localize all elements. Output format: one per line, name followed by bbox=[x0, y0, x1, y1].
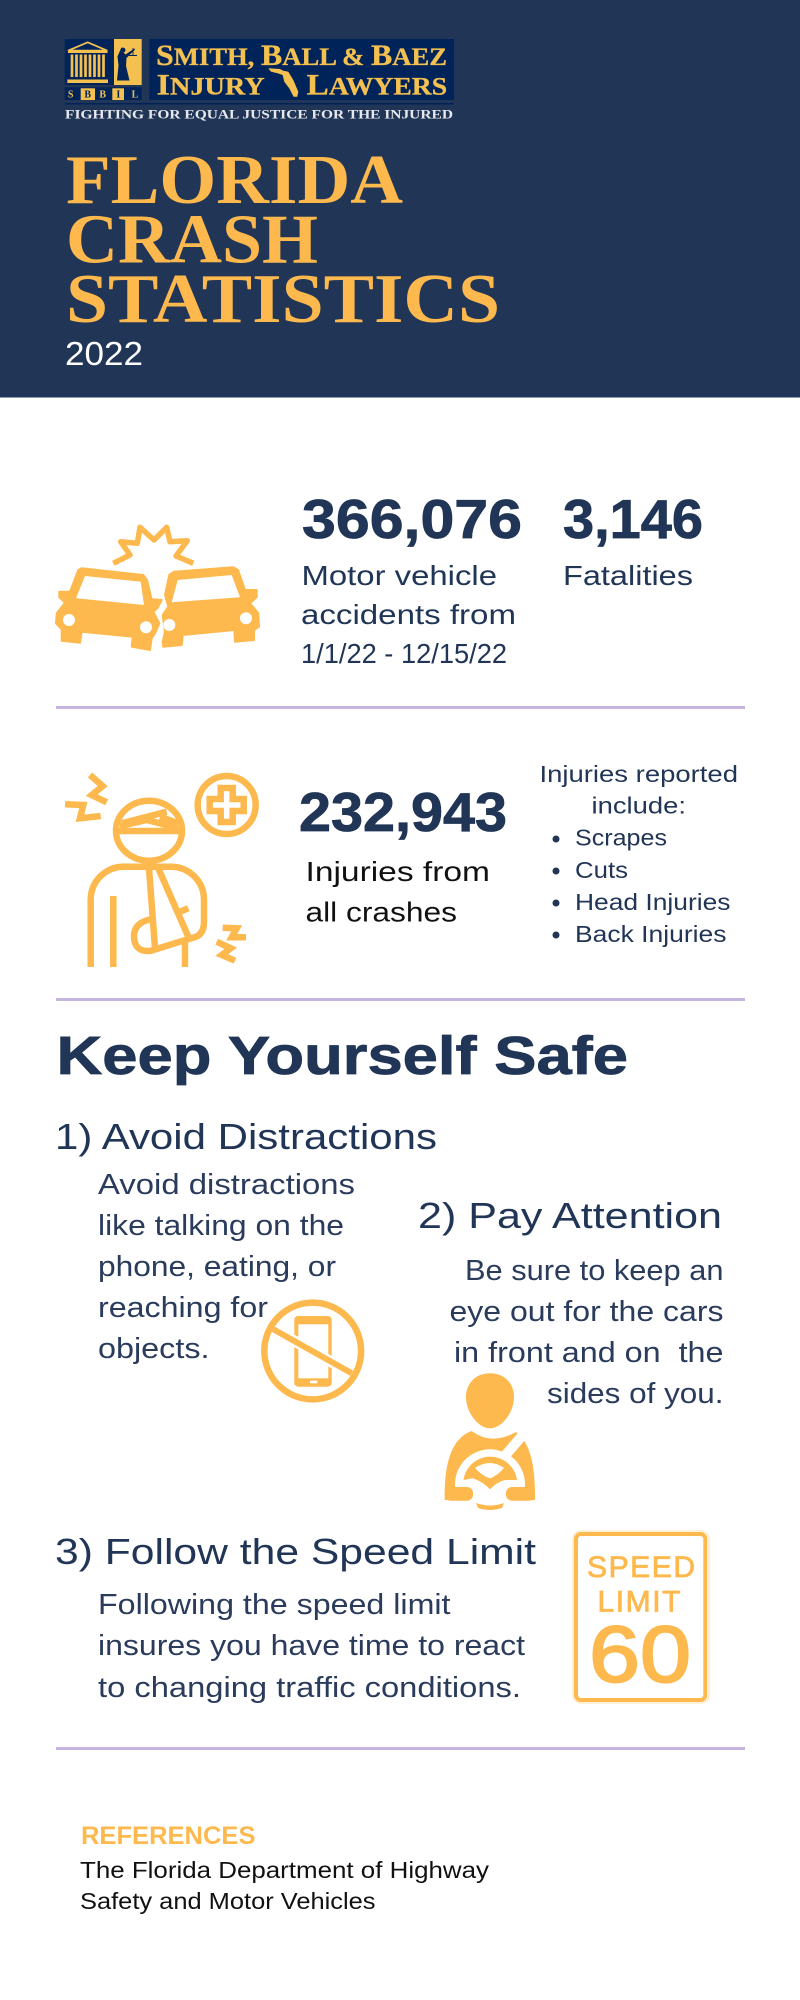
stat: injuries: 232,943 bbox=[299, 781, 507, 843]
list: injuries reported: Head Injuries bbox=[575, 889, 730, 915]
tip 2: pay attention: sides of you. bbox=[547, 1378, 724, 1410]
list: injuries reported bbox=[540, 761, 738, 947]
references: The Florida Department of Highway bbox=[80, 1857, 490, 1883]
logo: Smith, Ball & Baez Injury Lawyers: I bbox=[116, 90, 120, 101]
list: injuries reported: Injuries reported bbox=[540, 761, 738, 787]
logo: Smith, Ball & Baez Injury Lawyers: B bbox=[99, 90, 106, 101]
logo: Smith, Ball & Baez Injury Lawyers: S bbox=[68, 90, 74, 101]
tip 1: avoid distractions: reaching for bbox=[98, 1292, 268, 1324]
references: Safety and Motor Vehicles bbox=[80, 1888, 376, 1914]
logo: Smith, Ball & Baez Injury Lawyers: B bbox=[84, 90, 91, 101]
icon: speed limit 60 sign: 60 bbox=[589, 1610, 691, 1698]
icon: injured person bbox=[65, 775, 256, 967]
logo: Smith, Ball & Baez Injury Lawyers: LAWYERS bbox=[307, 68, 447, 101]
list: injuries reported: include: bbox=[592, 792, 686, 818]
stat: motor vehicle accidents: 1/1/22 - 12/15/22 bbox=[301, 638, 507, 669]
references: REFERENCES bbox=[81, 1822, 256, 1850]
references bbox=[80, 1822, 490, 1914]
tip 2: pay attention bbox=[418, 1195, 724, 1410]
stat: motor vehicle accidents: 366,076 bbox=[302, 488, 522, 550]
tip 3: follow the speed limit: Following the speed limit bbox=[98, 1589, 450, 1621]
icon: no phone bbox=[264, 1303, 361, 1399]
tip 2: pay attention: eye out for the cars bbox=[450, 1296, 724, 1328]
logo: Smith, Ball & Baez Injury Lawyers: SMITH, BALL & BAEZ bbox=[156, 39, 447, 72]
stat: fatalities: 3,146 bbox=[563, 488, 703, 550]
stat: fatalities bbox=[563, 488, 703, 591]
icon: driver at wheel bbox=[445, 1373, 535, 1519]
logo: Smith, Ball & Baez Injury Lawyers: L bbox=[132, 90, 139, 101]
icon: speed limit 60 sign bbox=[573, 1531, 709, 1703]
tip 1: avoid distractions: like talking on the bbox=[98, 1210, 344, 1242]
tip 1: avoid distractions: phone, eating, or bbox=[98, 1251, 336, 1283]
tip 3: follow the speed limit: to changing traffic conditions. bbox=[98, 1672, 521, 1704]
stat: motor vehicle accidents: Motor vehicle bbox=[302, 560, 497, 591]
tip 1: avoid distractions bbox=[55, 1116, 437, 1365]
year: 2022 bbox=[65, 335, 143, 372]
logo: Smith, Ball & Baez Injury Lawyers: FIGHTING FOR EQUAL JUSTICE FOR THE INJURED bbox=[65, 106, 453, 121]
panel: header bbox=[0, 0, 800, 398]
stat: motor vehicle accidents: accidents from bbox=[301, 599, 516, 630]
logo: Smith, Ball & Baez Injury Lawyers bbox=[65, 39, 454, 121]
icon: car crash bbox=[56, 527, 259, 650]
stat: injuries: all crashes bbox=[306, 896, 457, 928]
icon: speed limit 60 sign: SPEED bbox=[587, 1551, 695, 1584]
list: injuries reported: Scrapes bbox=[575, 825, 667, 851]
icon: speed limit 60 sign: LIMIT bbox=[598, 1586, 680, 1618]
title: STATISTICS bbox=[66, 261, 500, 338]
tip 1: avoid distractions: Avoid distractions bbox=[98, 1169, 355, 1201]
title: FLORIDA bbox=[66, 142, 403, 219]
stat: injuries: Injuries from bbox=[306, 856, 490, 887]
heading: keep yourself safe: Keep Yourself Safe bbox=[56, 1026, 628, 1086]
stat: fatalities: Fatalities bbox=[563, 560, 693, 591]
list: injuries reported: Cuts bbox=[575, 857, 628, 883]
stat: motor vehicle accidents bbox=[301, 488, 522, 669]
tip 3: follow the speed limit bbox=[55, 1531, 536, 1704]
tip 3: follow the speed limit: 3) Follow the Speed Limit bbox=[55, 1531, 536, 1572]
tip 3: follow the speed limit: insures you have time to react bbox=[98, 1630, 525, 1662]
tip 1: avoid distractions: 1) Avoid Distractions bbox=[55, 1116, 437, 1157]
tip 2: pay attention: in front and on the bbox=[454, 1337, 724, 1369]
title: CRASH bbox=[66, 202, 318, 278]
logo: Smith, Ball & Baez Injury Lawyers: INJURY bbox=[157, 68, 265, 101]
list: injuries reported: Back Injuries bbox=[575, 921, 726, 947]
stat: injuries bbox=[299, 781, 507, 928]
title bbox=[66, 142, 500, 338]
tip 1: avoid distractions: objects. bbox=[98, 1333, 210, 1365]
tip 2: pay attention: Be sure to keep an bbox=[465, 1255, 724, 1287]
tip 2: pay attention: 2) Pay Attention bbox=[418, 1195, 722, 1236]
